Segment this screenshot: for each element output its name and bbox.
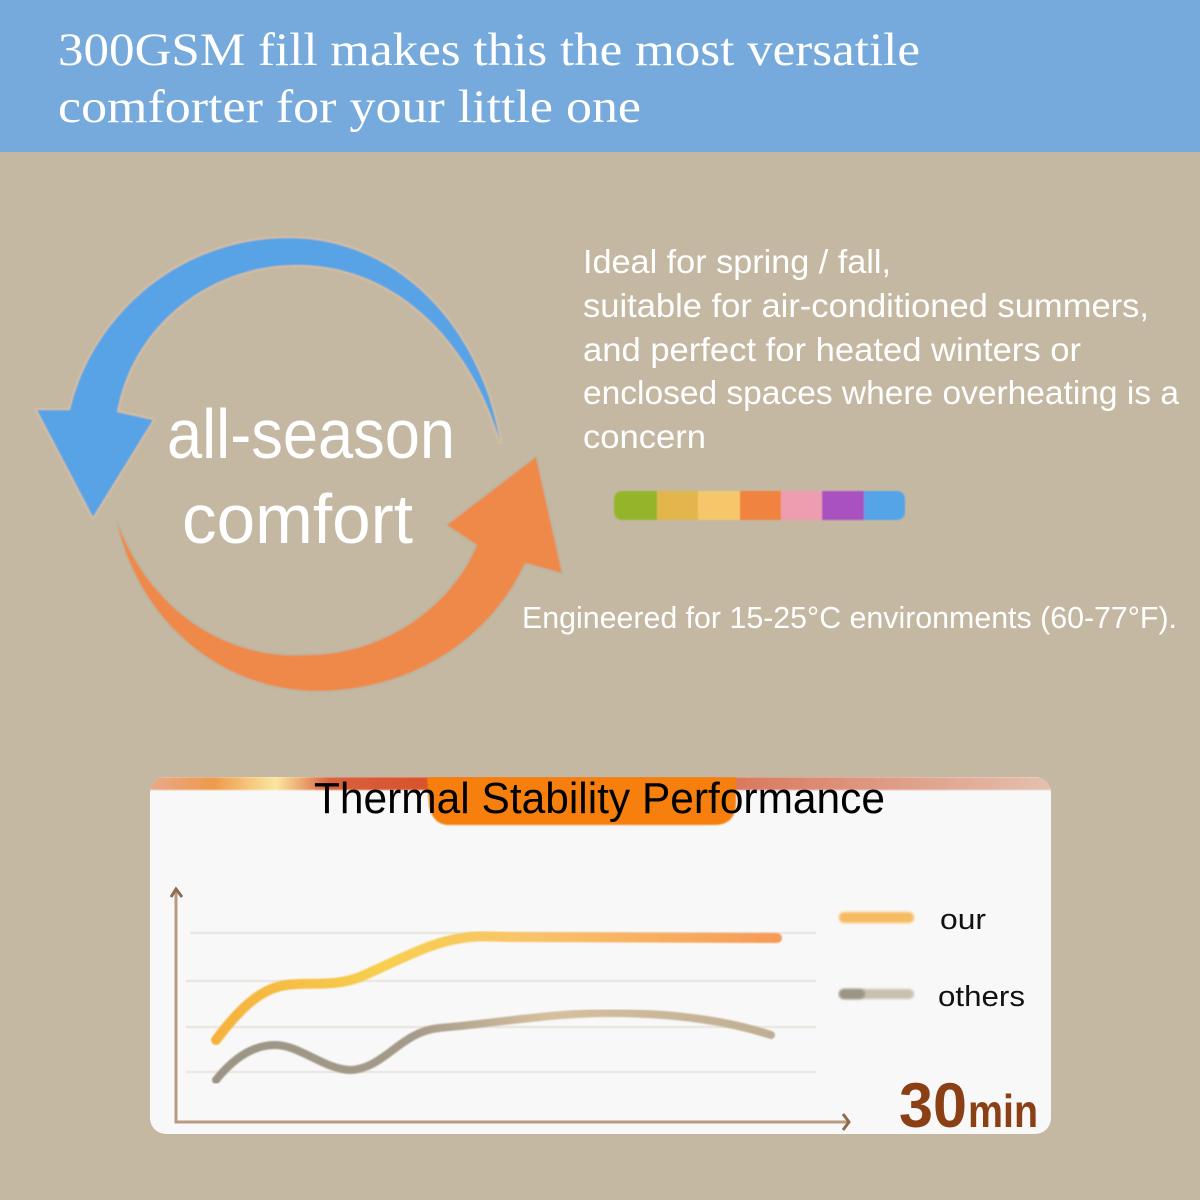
seasonal use description: and perfect for heated winters or (583, 331, 1081, 368)
panel: thermal stability chart (150, 774, 1051, 1141)
all-season comfort label: comfort (182, 480, 413, 558)
chart heading: Thermal Stability Performance (314, 774, 885, 823)
seasonal use description (583, 243, 1180, 455)
panel header strip (150, 777, 1051, 790)
title banner: 300GSM fill makes this the most versatile (58, 24, 920, 76)
duration label: min (968, 1085, 1038, 1137)
title banner (0, 0, 1200, 152)
line: our comforter (216, 936, 777, 1040)
seasonal use description: concern (583, 418, 706, 455)
orange heading tab (427, 777, 736, 825)
duration label (899, 1071, 1038, 1141)
legend: others: others (938, 981, 1025, 1013)
duration label: 30 (899, 1071, 967, 1141)
seasonal use description: Ideal for spring / fall, (583, 243, 891, 280)
legend: others (839, 981, 1025, 1013)
chart axes (171, 889, 849, 1130)
icon: orange circular arrow (117, 457, 562, 691)
legend: our: our (940, 904, 986, 936)
colour temperature bar (614, 491, 905, 520)
seasonal use description: suitable for air-conditioned summers, (583, 287, 1149, 324)
icon: blue circular arrow (37, 238, 500, 517)
line: other comforters (216, 1013, 771, 1080)
title banner: comforter for your little one (58, 81, 641, 133)
all-season cycle graphic (37, 238, 562, 691)
all-season comfort label: all-season (167, 395, 455, 473)
all-season comfort label (167, 395, 455, 558)
legend: our (839, 904, 986, 936)
temperature range note: Engineered for 15-25°C environments (60-77°F). (522, 600, 1177, 635)
seasonal use description: enclosed spaces where overheating is a (583, 374, 1180, 411)
